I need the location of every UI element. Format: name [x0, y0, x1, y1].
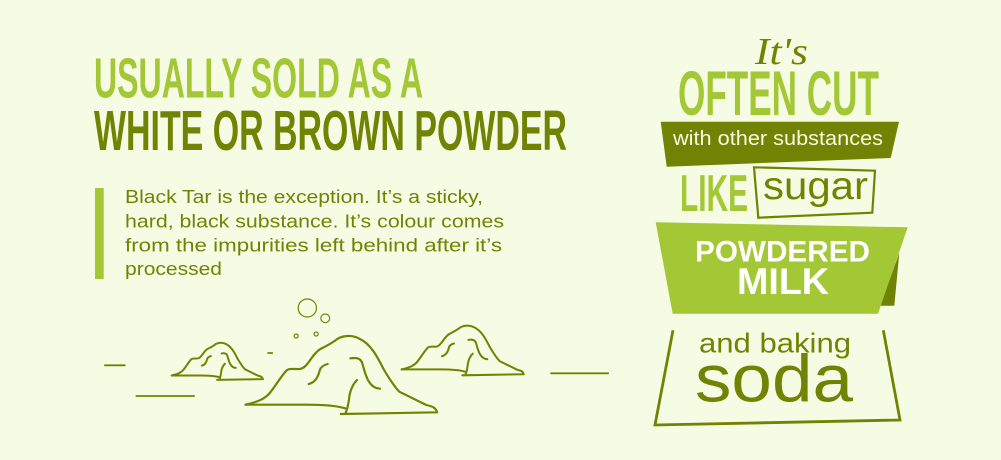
title — [94, 46, 567, 163]
banner: powdered milk: POWDERED — [695, 236, 870, 269]
banner body — [656, 222, 908, 314]
banner fold shadow — [880, 253, 899, 306]
banner: with other substances: with other substances — [672, 128, 883, 150]
banner: with other substances — [661, 122, 899, 167]
small left pile — [172, 343, 263, 380]
label: like: LIKE — [680, 165, 748, 223]
boxed label: sugar — [754, 165, 875, 218]
boxed label: sugar: sugar — [763, 165, 868, 208]
title: WHITE OR BROWN POWDER — [94, 99, 567, 163]
frame: and baking soda: and baking — [699, 328, 851, 359]
text block: black tar note: from the impurities left behind after it’s — [125, 236, 502, 256]
title: USUALLY SOLD AS A — [94, 46, 423, 110]
text block: black tar note: hard, black substance. It’s colour comes — [125, 212, 504, 232]
bubbles — [294, 299, 330, 338]
text block: black tar note: processed — [125, 259, 222, 279]
script heading: It's: It's — [754, 31, 808, 73]
frame: and baking soda: soda — [695, 342, 854, 417]
ground dashes — [105, 353, 608, 396]
banner: powdered milk: MILK — [737, 260, 829, 302]
large pile — [245, 336, 437, 414]
text block: black tar note — [125, 187, 504, 279]
banner: powdered milk — [656, 222, 908, 314]
frame: and baking soda — [655, 328, 900, 425]
medium right pile — [402, 326, 524, 375]
accent bar — [95, 188, 104, 279]
illustration: powder piles — [105, 299, 608, 414]
text block: black tar note: Black Tar is the exception. It’s a sticky, — [125, 187, 483, 207]
